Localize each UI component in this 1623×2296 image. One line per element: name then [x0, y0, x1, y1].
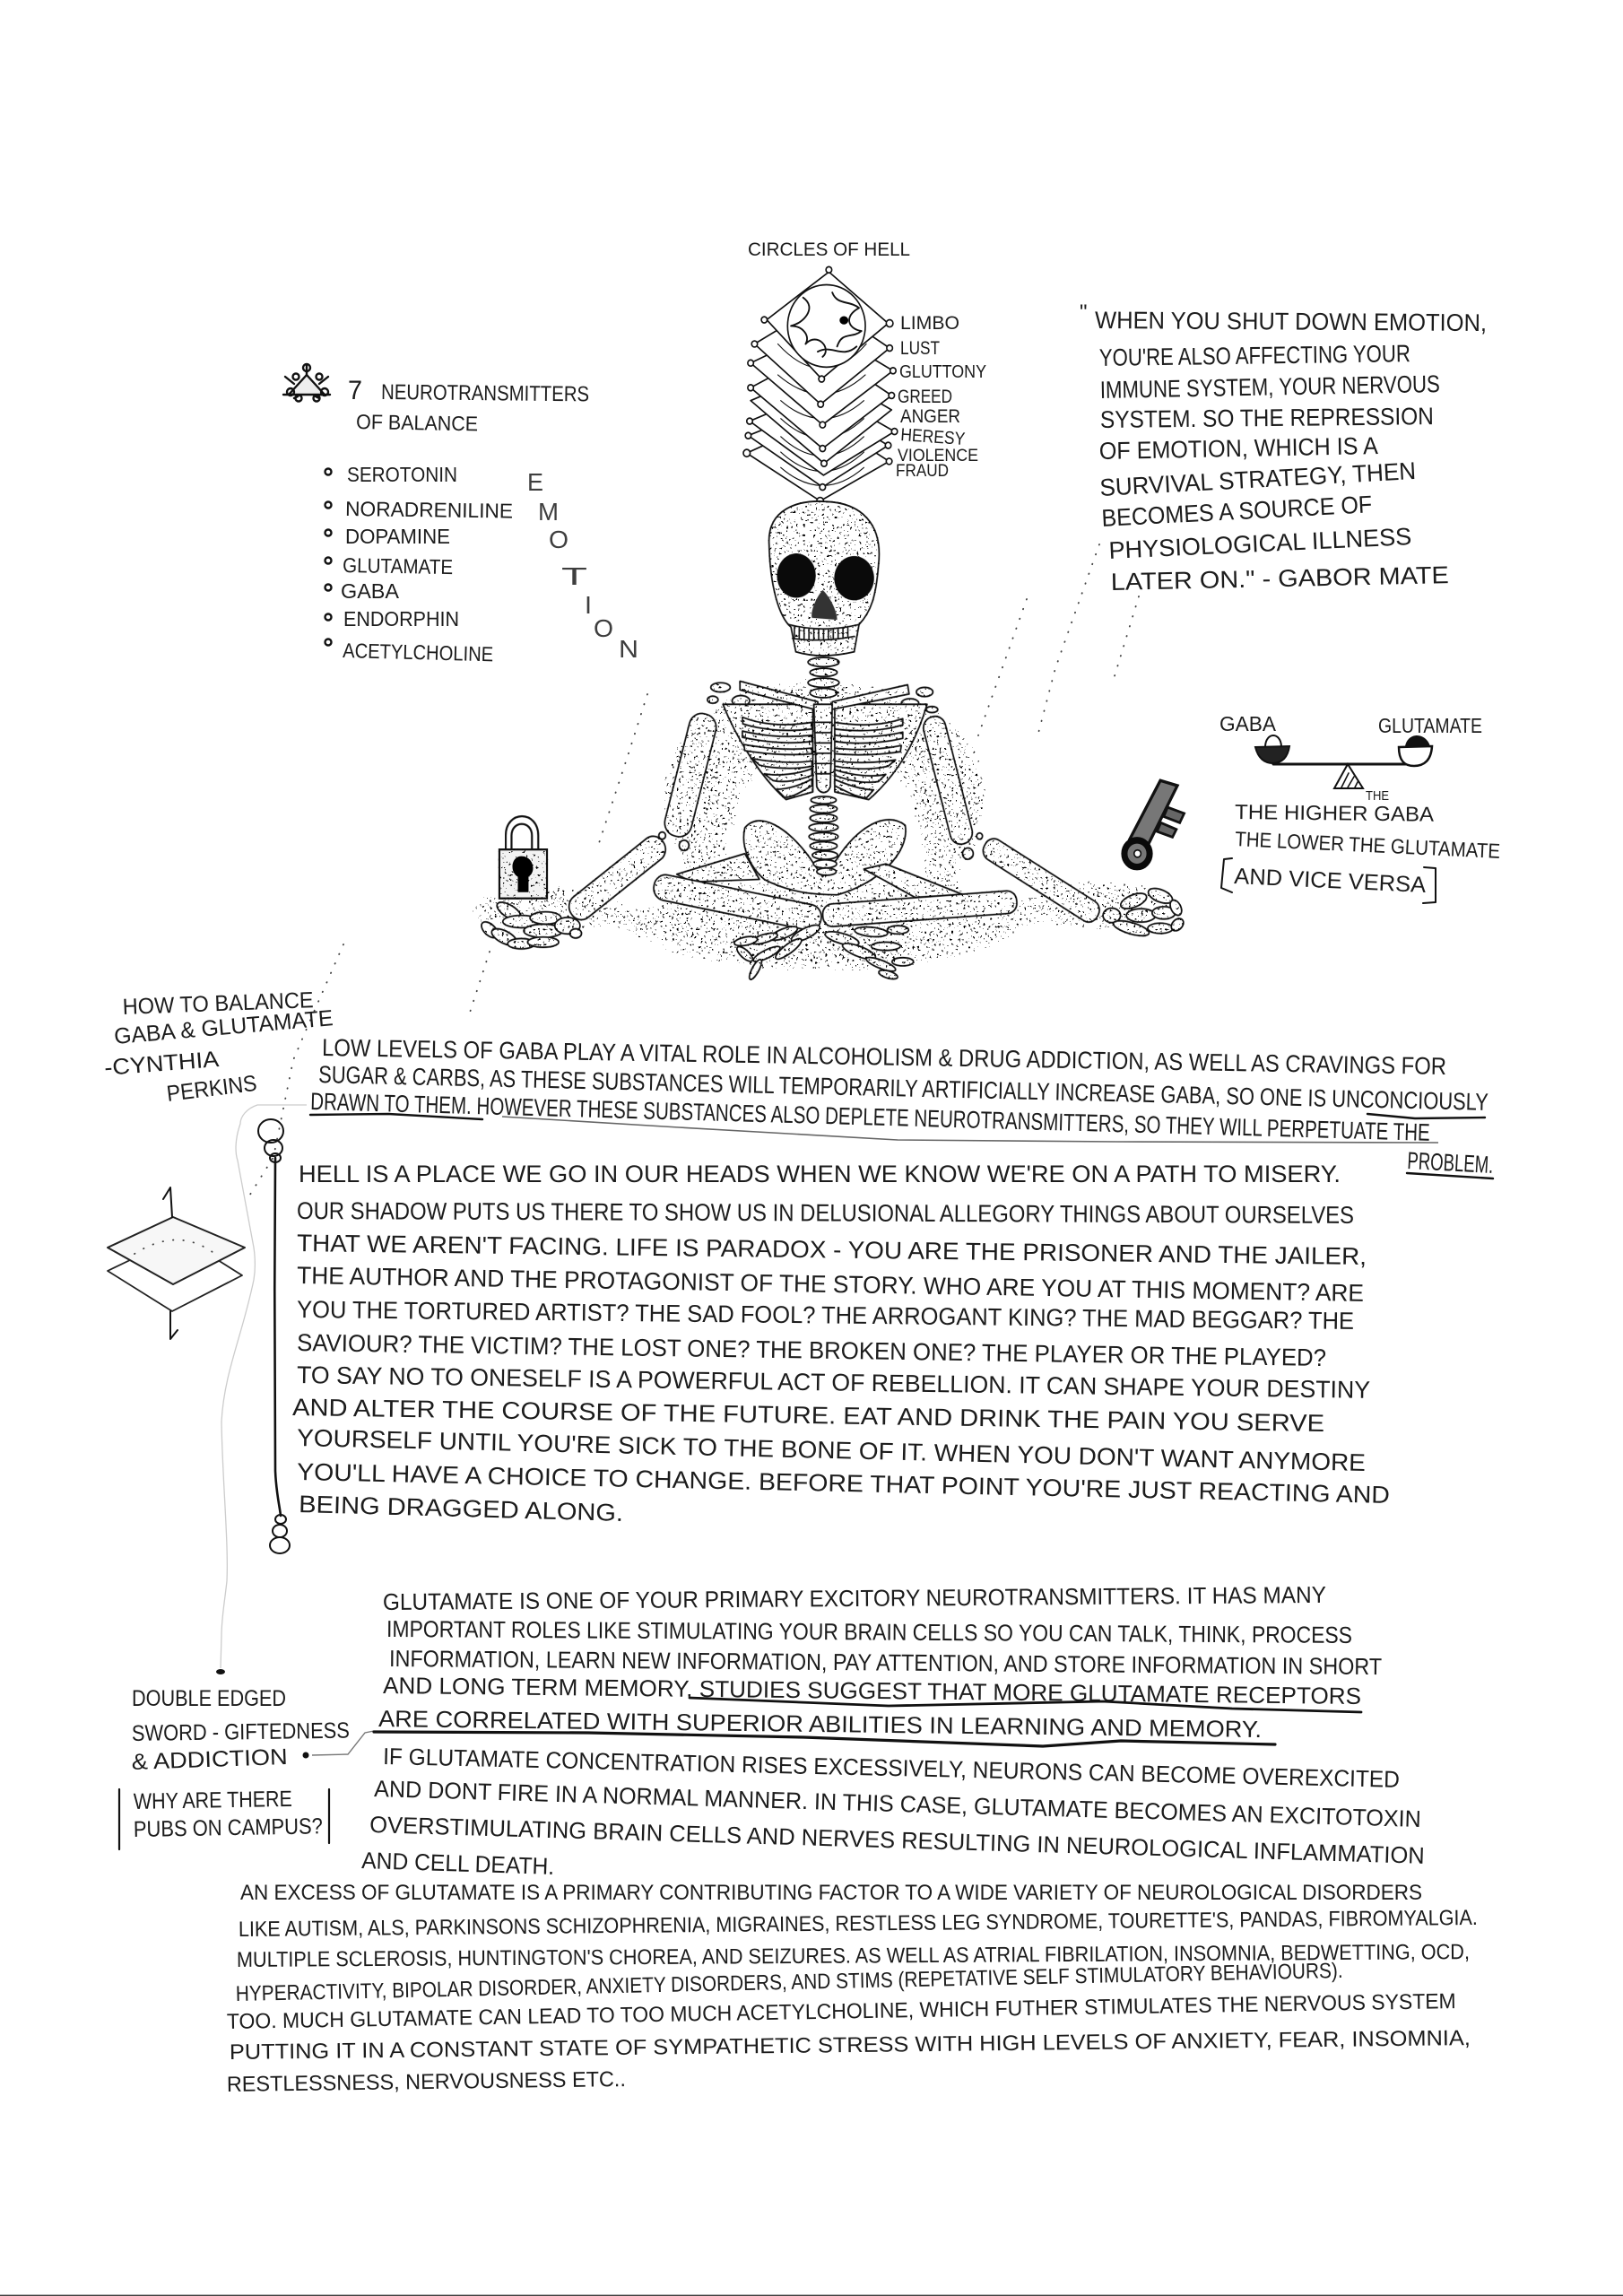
caption: higher gaba lower glutamate: AND VICE VERSA [1234, 864, 1427, 898]
paragraph: hell is a place [292, 1161, 1390, 1526]
side note: double edged sword: & ADDICTION [131, 1744, 288, 1775]
paragraph: hell is a place: HELL IS A PLACE WE GO IN OUR HEADS WHEN WE KNOW WE'RE ON A PATH TO MISERY. [299, 1161, 1341, 1187]
scale labels [1219, 712, 1482, 737]
paragraph: glutamate: IF GLUTAMATE CONCENTRATION RISES EXCESSIVELY, NEURONS CAN BECOME OVEREXCITED [383, 1743, 1400, 1793]
paragraph: excess of glutamate: RESTLESSNESS, NERVOUSNESS ETC.. [227, 2067, 626, 2097]
foot: left [733, 922, 821, 981]
caption: higher gaba lower glutamate: THE HIGHER GABA [1235, 800, 1435, 826]
side note: double edged sword: DOUBLE EDGED [132, 1686, 286, 1711]
leg: left shin [652, 873, 823, 933]
paragraph: excess of glutamate: MULTIPLE SCLEROSIS, HUNTINGTON'S CHOREA, AND SEIZURES. AS WELL AS ATRIAL FIBRILATION, INSOMNIA, BEDWETTING, OCD, [237, 1940, 1470, 1972]
paragraph: excess of glutamate: PUTTING IT IN A CONSTANT STATE OF SYMPATHETIC STRESS WITH HIGH LEVELS OF ANXIETY, FEAR, INSOMNIA, [230, 2026, 1471, 2065]
icon: neurotransmitter star [283, 364, 330, 402]
diagonal word: emotion: T [561, 562, 587, 590]
paragraph: excess of glutamate: LIKE AUTISM, ALS, PARKINSONS SCHIZOPHRENIA, MIGRAINES, RESTLESS LEG SYNDROME, TOURETTE'S, PANDAS, FIBROMYALGIA. [239, 1906, 1478, 1942]
paragraph: glutamate: GLUTAMATE IS ONE OF YOUR PRIMARY EXCITORY NEUROTRANSMITTERS. IT HAS MANY [383, 1581, 1326, 1615]
list: neurotransmitters: NORADRENILINE [345, 497, 513, 523]
paragraph: hell is a place: TO SAY NO TO ONESELF IS A POWERFUL ACT OF REBELLION. IT CAN SHAPE YOUR DESTINY [297, 1361, 1370, 1404]
list: neurotransmitters: ACETYLCHOLINE [343, 639, 493, 665]
list: neurotransmitters: DOPAMINE [345, 525, 450, 548]
icon: key [1124, 780, 1185, 867]
diagonal word: emotion: N [619, 635, 638, 663]
paragraph: glutamate [361, 1581, 1425, 1880]
labels: circles of hell: LUST [900, 338, 940, 359]
caption: higher gaba lower glutamate [1221, 788, 1501, 903]
side note: why are there pubs on campus: WHY ARE THERE [134, 1787, 292, 1814]
shoulders and joints [711, 683, 730, 692]
quote: Gabor Mate: " [1080, 300, 1088, 325]
arm: forearm left [564, 831, 670, 925]
clavicles [740, 681, 819, 710]
ribs right [835, 718, 903, 731]
paragraph: excess of glutamate [227, 1881, 1478, 2097]
stipple halo [448, 483, 1197, 987]
sternum [814, 704, 832, 793]
skull details [777, 553, 874, 640]
dotted connector lines [248, 544, 1139, 1197]
heading: how to balance GABA and glutamate: PERKINS [165, 1071, 258, 1107]
leg: right shin [822, 891, 1018, 927]
diagonal word: emotion: O [549, 526, 568, 553]
title: 7 neurotransmitters of balance: NEUROTRANSMITTERS [381, 380, 589, 406]
labels: circles of hell: GREED [898, 387, 952, 407]
hand: right [1103, 885, 1185, 939]
grey connector line with end dot [216, 1105, 307, 1674]
neck [808, 657, 839, 666]
scale labels: GABA [1219, 712, 1277, 735]
caption: higher gaba lower glutamate: THE LOWER THE GLUTAMATE [1235, 827, 1501, 863]
quote: Gabor Mate: LATER ON." - GABOR MATE [1110, 561, 1449, 596]
paragraph: hell is a place: YOU THE TORTURED ARTIST? THE SAD FOOL? THE ARROGANT KING? THE MAD BEGGAR? THE [297, 1296, 1354, 1335]
hand: left [479, 899, 582, 949]
side note: why are there pubs on campus [119, 1787, 329, 1849]
labels: circles of hell: VIOLENCE [898, 447, 978, 465]
heading: how to balance GABA and glutamate: HOW TO BALANCE [122, 987, 314, 1020]
nose [812, 590, 838, 620]
list: neurotransmitters: SEROTONIN [347, 463, 457, 486]
scanner edge line [0, 2295, 1623, 2296]
icon: scale beam with bowls [1255, 735, 1432, 788]
ribcage backing [723, 704, 927, 799]
paragraph: glutamate: INFORMATION, LEARN NEW INFORMATION, PAY ATTENTION, AND STORE INFORMATION IN SHORT [389, 1645, 1382, 1680]
title: circles of hell: CIRCLES OF HELL [748, 239, 910, 260]
stack of circles of hell [743, 266, 898, 505]
heading: how to balance GABA and glutamate: GABA & GLUTAMATE [113, 1005, 334, 1049]
paragraph: hell is a place: YOURSELF UNTIL YOU'RE SICK TO THE BONE OF IT. WHEN YOU DON'T WANT ANYMORE [297, 1424, 1366, 1476]
side note: double edged sword [131, 1686, 374, 1775]
illustration: meditating skeleton with circles of hell [448, 266, 1197, 987]
list: neurotransmitters [325, 463, 513, 665]
diagonal word: emotion: M [538, 498, 559, 526]
list: neurotransmitters: ENDORPHIN [343, 607, 459, 631]
sternum ticks [815, 722, 831, 774]
labels: circles of hell [896, 313, 986, 481]
title: 7 neurotransmitters of balance: OF BALANCE [356, 410, 478, 435]
arm: upper left [662, 710, 719, 839]
labels: circles of hell: LIMBO [900, 313, 959, 334]
quote: Gabor Mate: PHYSIOLOGICAL ILLNESS [1108, 523, 1412, 564]
teeth [788, 624, 859, 640]
diagonal word: emotion: O [594, 614, 613, 642]
paragraph: hell is a place: THAT WE AREN'T FACING. LIFE IS PARADOX - YOU ARE THE PRISONER AND THE JAILER, [297, 1230, 1367, 1270]
scale labels: GLUTAMATE [1378, 714, 1482, 737]
connector dots [743, 266, 898, 505]
title: 7 neurotransmitters of balance: 7 [348, 376, 362, 405]
paragraph: hell is a place: BEING DRAGGED ALONG. [299, 1491, 624, 1526]
paragraph: glutamate: AND DONT FIRE IN A NORMAL MANNER. IN THIS CASE, GLUTAMATE BECOMES AN EXCITOTOXIN [374, 1775, 1421, 1832]
paragraph: hell is a place: YOU'LL HAVE A CHOICE TO CHANGE. BEFORE THAT POINT YOU'RE JUST REACTING AND [297, 1458, 1390, 1509]
paragraph: excess of glutamate: TOO. MUCH GLUTAMATE CAN LEAD TO TOO MUCH ACETYLCHOLINE, WHICH FUTHER STIMULATES THE NERVOUS SYSTEM [227, 1989, 1456, 2034]
labels: circles of hell: FRAUD [896, 462, 949, 481]
top diamond with brain circle [767, 272, 889, 379]
icon: padlock [499, 816, 547, 899]
eye sockets [777, 553, 816, 597]
paragraph: low levels of GABA [310, 1034, 1494, 1178]
diagonal word: emotion: E [527, 468, 543, 496]
paragraph: hell is a place: SAVIOUR? THE VICTIM? THE LOST ONE? THE BROKEN ONE? THE PLAYER OR THE PLAYED? [297, 1329, 1326, 1371]
quote: Gabor Mate: SURVIVAL STRATEGY, THEN [1099, 457, 1417, 501]
icon: two stacked diamonds [108, 1187, 245, 1339]
panel: GABA glutamate balance scale [1219, 712, 1501, 903]
caption: higher gaba lower glutamate: THE [1366, 788, 1389, 804]
labels: circles of hell: ANGER [900, 406, 960, 427]
foot: right [824, 926, 914, 981]
paragraph: low levels of GABA: PROBLEM. [1407, 1147, 1494, 1178]
quote: Gabor Mate: WHEN YOU SHUT DOWN EMOTION, [1095, 307, 1487, 336]
paragraph: glutamate: OVERSTIMULATING BRAIN CELLS AND NERVES RESULTING IN NEUROLOGICAL INFLAMMATION [369, 1811, 1425, 1869]
paragraph: hell is a place: THE AUTHOR AND THE PROTAGONIST OF THE STORY. WHO ARE YOU AT THIS MOMENT? ARE [297, 1262, 1364, 1307]
diagonal word: emotion: I [585, 591, 592, 619]
quote: Gabor Mate: OF EMOTION, WHICH IS A [1099, 432, 1378, 465]
list: neurotransmitters: GLUTAMATE [343, 553, 453, 578]
heading: how to balance GABA and glutamate: -CYNTHIA [103, 1047, 220, 1081]
ribs left [742, 718, 812, 730]
heading: 7 neurotransmitters panel [283, 364, 589, 665]
paragraph: glutamate: ARE CORRELATED WITH SUPERIOR ABILITIES IN LEARNING AND MEMORY. [378, 1705, 1262, 1743]
bones [479, 501, 1185, 981]
quote: Gabor Mate: BECOMES A SOURCE OF [1101, 491, 1373, 532]
quote: Gabor Mate [1080, 300, 1487, 596]
skull [769, 501, 879, 656]
paragraph: hell is a place: AND ALTER THE COURSE OF THE FUTURE. EAT AND DRINK THE PAIN YOU SERVE [292, 1394, 1324, 1437]
decorative column with beads [258, 1119, 290, 1553]
paragraph: glutamate: AND LONG TERM MEMORY. STUDIES SUGGEST THAT MORE GLUTAMATE RECEPTORS [383, 1672, 1361, 1709]
paragraph: low levels of GABA: LOW LEVELS OF GABA PLAY A VITAL ROLE IN ALCOHOLISM & DRUG ADDICTION, AS WELL AS CRAVINGS FOR [322, 1034, 1446, 1080]
quote: Gabor Mate: YOU'RE ALSO AFFECTING YOUR [1099, 340, 1410, 371]
spine [811, 796, 837, 804]
quote: Gabor Mate: IMMUNE SYSTEM, YOUR NERVOUS [1100, 370, 1440, 404]
paragraph: hell is a place: OUR SHADOW PUTS US THERE TO SHOW US IN DELUSIONAL ALLEGORY THINGS ABOUT OURSELVES [297, 1197, 1354, 1229]
labels: circles of hell: GLUTTONY [899, 362, 986, 382]
list: neurotransmitters: GABA [341, 579, 400, 603]
heading: how to balance GABA and glutamate [103, 987, 334, 1107]
title: 7 neurotransmitters of balance [348, 376, 589, 435]
quote: Gabor Mate: SYSTEM. SO THE REPRESSION [1100, 403, 1434, 433]
side note: why are there pubs on campus: PUBS ON CAMPUS? [134, 1813, 323, 1842]
labels: circles of hell: HERESY [900, 425, 966, 449]
diagonal word: emotion [527, 468, 638, 663]
paragraph: excess of glutamate: HYPERACTIVITY, BIPOLAR DISORDER, ANXIETY DISORDERS, AND STIMS (REPETATIVE SELF STIMULATORY BEHAVIOURS). [236, 1959, 1343, 2006]
arm: upper right [921, 714, 975, 847]
paragraph: excess of glutamate: AN EXCESS OF GLUTAMATE IS A PRIMARY CONTRIBUTING FACTOR TO A WIDE VARIETY OF NEUROLOGICAL DISORDERS [240, 1881, 1422, 1905]
side note: double edged sword: SWORD - GIFTEDNESS [132, 1718, 350, 1746]
pelvis [743, 820, 906, 895]
thighs [677, 854, 759, 882]
paragraph: glutamate: IMPORTANT ROLES LIKE STIMULATING YOUR BRAIN CELLS SO YOU CAN TALK, THINK, PROCESS [386, 1615, 1352, 1648]
arm: forearm right [979, 835, 1103, 926]
paragraph: glutamate: AND CELL DEATH. [361, 1847, 555, 1880]
